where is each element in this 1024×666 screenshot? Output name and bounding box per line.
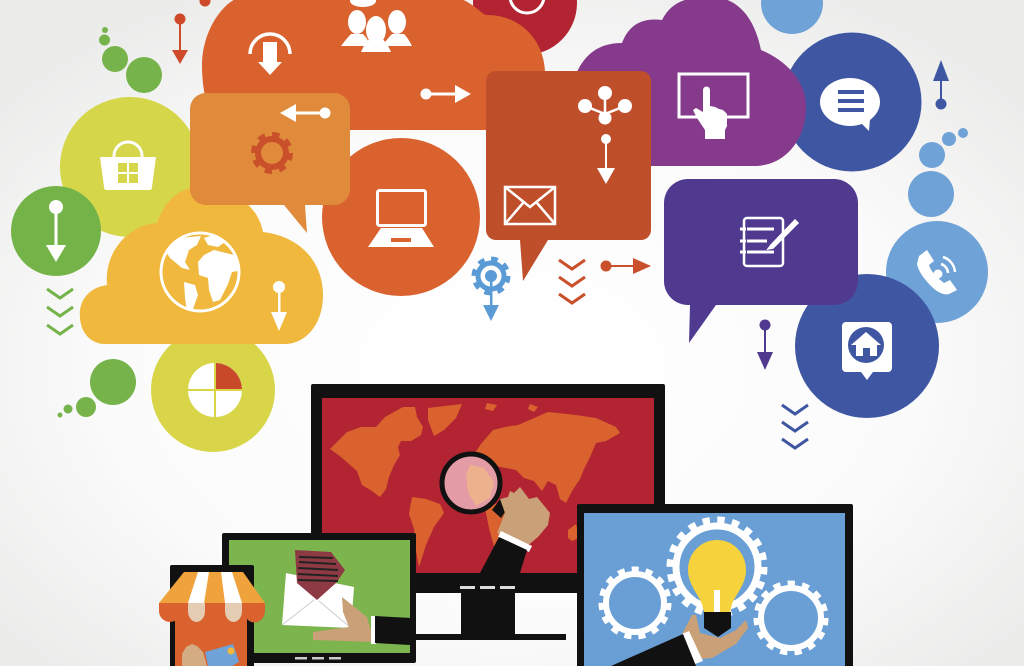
panel: light blue circle with phone	[886, 221, 988, 323]
hand with sleeve	[313, 597, 412, 645]
icon: down arrow	[597, 134, 615, 184]
panel: orange cloud	[202, 0, 545, 130]
panel: orange circle with laptop	[322, 138, 480, 296]
icon: right arrow	[420, 85, 471, 103]
icon: chat bubble	[820, 78, 880, 131]
icon: blue gear arrow	[474, 259, 508, 321]
icon: blue arrow up	[933, 60, 949, 110]
panel: blue monitor with gears and bulb	[577, 504, 853, 666]
gear large	[670, 520, 764, 614]
phone screen	[175, 611, 247, 666]
world map	[330, 403, 620, 567]
panel: left green cluster	[11, 27, 275, 452]
monitor screen	[322, 398, 654, 573]
magnifier and hand	[442, 454, 550, 573]
lower lime circle with pie chart	[151, 328, 275, 452]
shop awning	[159, 572, 265, 623]
panel: desktop monitor with world map	[311, 384, 665, 640]
icon: people group	[341, 0, 412, 52]
light blue circle top	[761, 0, 823, 34]
blue chevrons	[782, 405, 808, 448]
icon: left arrow	[280, 104, 330, 122]
panel: red circle top	[473, 0, 577, 55]
icon: rust arrow right	[600, 258, 651, 274]
icon: notepad and pen	[740, 218, 798, 266]
monitor frame	[577, 504, 853, 666]
monitor stand	[416, 590, 566, 640]
green bubbles top	[99, 27, 162, 93]
green circle with down arrow	[11, 186, 101, 276]
panel: tablet with envelope	[222, 533, 416, 663]
icon: download arc	[250, 34, 290, 75]
icon: envelope	[505, 187, 555, 224]
green chevrons	[47, 289, 73, 334]
monitor frame	[311, 384, 665, 593]
light bulb	[688, 540, 746, 637]
hand with sleeve	[611, 615, 748, 666]
tablet screen	[229, 540, 410, 653]
green bubbles bottom	[58, 359, 136, 418]
icon: home pin	[842, 322, 892, 380]
phone frame	[170, 565, 254, 666]
icon: globe	[161, 233, 244, 312]
lime circle with basket	[60, 97, 200, 237]
gear left	[602, 570, 668, 636]
panel: blue circle with chat icon	[782, 32, 922, 172]
icon: gear	[254, 134, 290, 172]
tablet frame	[222, 533, 416, 663]
blue bubbles right	[908, 128, 968, 217]
panel: rust speech bubble	[486, 71, 651, 281]
panel: dark blue circle with home	[795, 274, 939, 418]
icon: indigo arrow down	[757, 320, 773, 370]
monitor screen	[584, 513, 845, 666]
icon: laptop	[368, 190, 434, 247]
gear right	[756, 584, 826, 652]
panel: phone with shop awning	[170, 565, 254, 666]
hand and credit card	[182, 644, 239, 666]
tablet dashes	[295, 657, 341, 660]
panel: purple cloud with touchscreen	[560, 0, 806, 166]
icon: red arrow down	[172, 0, 210, 64]
rust chevrons	[559, 260, 585, 303]
envelope and letter	[282, 550, 354, 628]
icon: touch screen	[679, 74, 748, 139]
icon: node network	[578, 86, 632, 124]
power dashes	[460, 586, 515, 589]
icon: down arrow	[271, 281, 287, 331]
panel: yellow cloud with globe	[80, 187, 323, 344]
panel: purple speech bubble with notepad	[664, 179, 858, 343]
icon: phone handset	[917, 250, 957, 294]
panel: orange speech bubble with gear	[190, 93, 350, 233]
